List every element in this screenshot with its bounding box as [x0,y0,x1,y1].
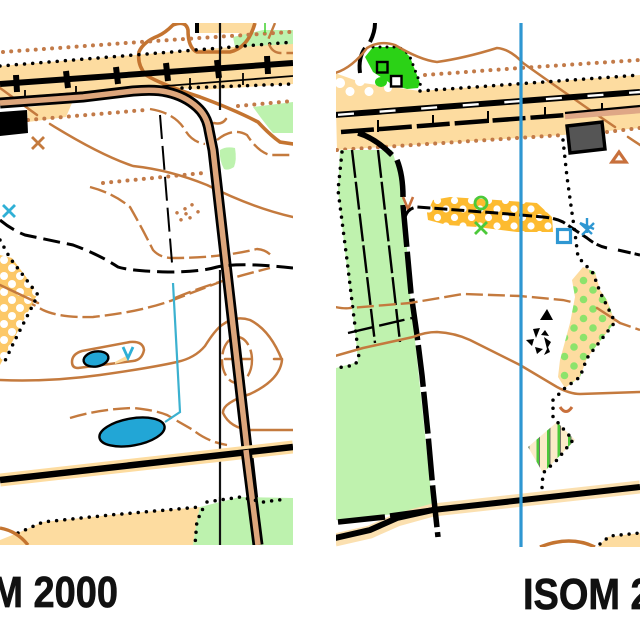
black dots around yellow area [0,240,38,367]
blue star [580,218,594,235]
thick dashed road [358,133,438,537]
black vertical power line [219,23,221,545]
brown contour bottom left [0,528,28,545]
blue square [558,230,570,242]
green patch top right [233,30,293,47]
contour over strip [597,308,620,323]
tan patch at top [199,23,253,35]
paved road [335,487,640,538]
railway white dashes [338,92,640,115]
green x [475,222,487,234]
main road fill [0,90,258,545]
brown dotted line centre [103,173,203,183]
brown contour bottom [540,541,595,547]
road halo [335,487,640,540]
tan field bottom [598,533,640,547]
knoll dots [175,203,200,222]
fenced dashed path [338,510,433,522]
paved road halo [0,447,293,480]
brown dotted line below rail [337,135,563,150]
black dotted line [420,75,640,91]
railway thick line [0,63,293,84]
black dots field bottom [600,533,640,544]
open land tan band [0,42,293,100]
contour long [335,332,640,394]
power line over field [219,497,221,545]
contour lines group [0,109,293,445]
black dotted line top [0,42,293,66]
orange dotted strip [427,197,553,232]
brown dotted line right [607,128,640,132]
black dotted line below railway [182,84,293,88]
green patch right [253,102,293,133]
dotted yellow area [0,255,38,365]
blue x [3,205,15,217]
boulder triangle [540,309,553,320]
green field [336,150,433,520]
blue v depression [123,347,133,358]
thin ticks [25,73,243,102]
hook contour [214,119,226,124]
black dots on field edge [337,152,359,368]
white square marker [391,76,402,86]
black building [0,110,28,136]
panel: ISOM 2017 map [335,23,640,547]
blue stream [165,283,180,422]
long contour lower [0,318,293,430]
green blob [220,147,236,170]
small pond [82,349,110,369]
road fill crossing field [246,450,258,545]
dashed contour centre [90,187,273,258]
brown dotted line below road [28,110,145,120]
brown dotted line top [425,60,640,75]
black dashed curve [360,23,375,73]
black dots path [542,140,615,488]
thick contour top [173,23,255,52]
dashed contour right [217,132,290,155]
railway line [335,92,640,115]
black dots around thicket [373,47,421,88]
white dots on tan [335,76,392,96]
paved road [0,447,293,480]
brown dotted line right [238,101,292,106]
long contour [50,124,293,217]
field inner lines [352,150,400,343]
black dashed track [0,220,293,272]
dashed contour crossing road [175,268,270,298]
railway ticks [16,56,268,92]
boulder cluster [526,328,551,355]
dashed ring contour [222,337,252,383]
second dashed line [341,115,566,132]
grey building [567,122,605,153]
dot knoll cluster [175,203,200,222]
thin dashed black path [160,115,172,263]
green square marker [377,62,388,72]
ticks on dashed line [378,103,602,132]
field cross line [348,318,412,333]
road strip right [565,110,640,116]
dashed contour left to road [0,282,220,317]
tan field bottom [0,507,200,545]
small tan patch [115,356,128,364]
brown smile [560,407,572,412]
brown triangle [612,152,626,162]
brown contour top [335,43,640,145]
contour: diagonal in tan [0,88,37,115]
contour ticks [225,358,282,360]
black dashed track [405,207,640,255]
thin line below railway [25,76,293,97]
tan patch under road [27,103,72,122]
dashed contours upper [150,109,205,144]
thick index contour [139,25,293,144]
green dot [375,77,387,87]
dark green thicket [365,47,420,89]
panel: ISOM 2000 map [0,23,293,545]
brown x [32,137,44,149]
striped green area [528,422,575,473]
blue line [519,23,523,547]
green field bottom [193,497,293,545]
closed contour around pond [72,342,144,368]
contour dashed [335,294,640,330]
contour over yellow [0,285,38,303]
thin line above strip [565,106,640,113]
brown v [403,197,413,209]
brown dashed top right [268,23,293,53]
black stub at top [195,23,199,33]
road crossing field [246,450,258,545]
brown dotted line top [3,32,290,52]
main road casing [0,90,258,545]
open land tan band [335,73,640,150]
large lake [98,416,166,448]
green dotted strip [558,267,615,388]
black dots on green edge [207,497,287,502]
black dots around field [18,507,203,545]
dashed contour above lake [70,408,227,445]
white dot row [335,76,392,96]
green circle [475,197,487,209]
green stub at top [264,23,266,33]
